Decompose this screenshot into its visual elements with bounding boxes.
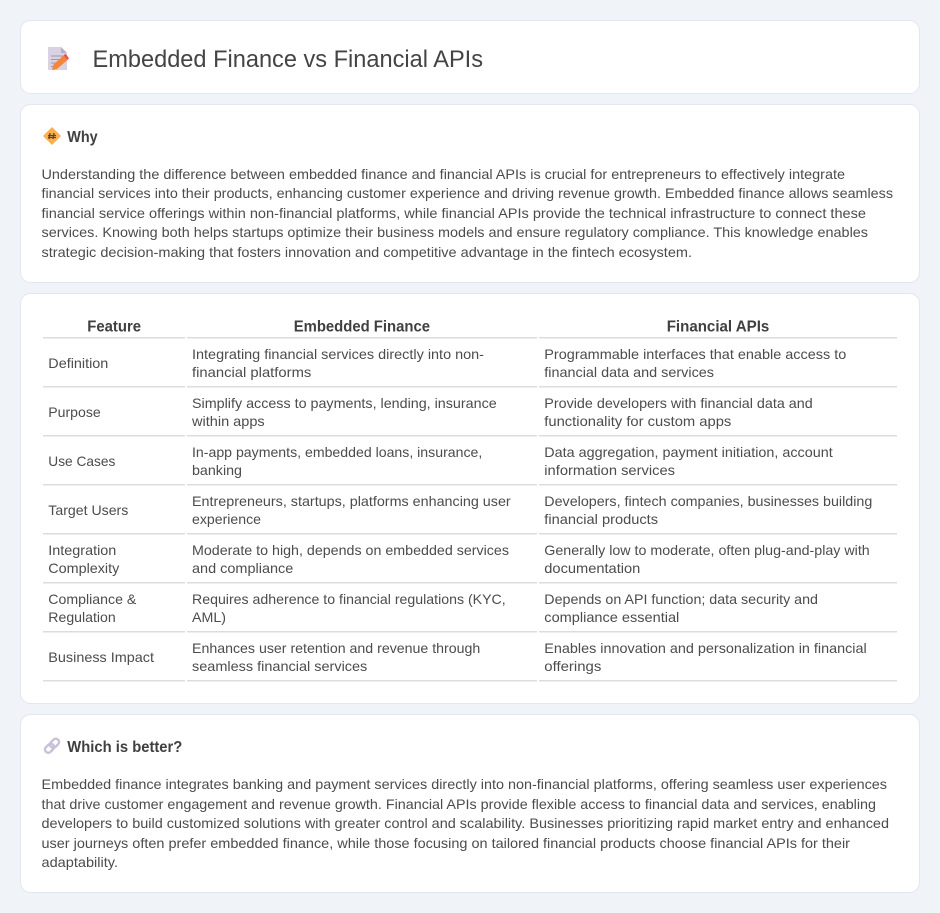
row: integration complexity: Moderate to high, depends on embedded services — [192, 542, 509, 558]
row: use cases: In-app payments, embedded loans, insurance, — [192, 444, 482, 460]
row: target users: financial products — [544, 511, 658, 527]
panel: comparison table — [20, 294, 920, 704]
row: business impact: Business Impact — [48, 649, 154, 665]
row: business impact — [48, 640, 867, 674]
panel: why — [20, 104, 920, 282]
text block: which is better paragraph: Embedded finance integrates banking and payment services directly into non-financial platforms, offering seamless user experiences — [42, 776, 887, 792]
row: integration complexity: documentation — [544, 560, 640, 576]
text block: why paragraph: Understanding the difference between embedded finance and financial APIs is crucial for entrepreneurs to effectively integrate — [42, 166, 845, 182]
text block: which is better paragraph: adaptability. — [42, 854, 118, 870]
text block: why paragraph — [42, 166, 893, 260]
row: target users: Developers, fintech companies, businesses building — [544, 493, 872, 509]
row: target users: Entrepreneurs, startups, platforms enhancing user — [192, 493, 511, 509]
row: purpose: Provide developers with financial data and — [544, 395, 813, 411]
row: use cases: information services — [544, 462, 675, 478]
text block: why paragraph: financial service offerings within non-financial platforms, while financial APIs provide the technical infrastructure to connect these — [42, 205, 866, 221]
row: compliance and regulation: Compliance & — [48, 591, 137, 607]
text block: which is better paragraph: that drive customer engagement and revenue growth. Financial APIs provide flexible access to financial data and services, enabling — [42, 796, 876, 812]
row: business impact: Enhances user retention and revenue through — [192, 640, 480, 656]
row: purpose: Simplify access to payments, lending, insurance — [192, 395, 497, 411]
table header row — [87, 319, 769, 336]
row: purpose: within apps — [191, 413, 265, 429]
row: target users: experience — [192, 511, 261, 527]
row: use cases: banking — [192, 462, 242, 478]
text block: which is better paragraph — [42, 776, 889, 870]
row: use cases — [48, 444, 833, 478]
row: purpose: Purpose — [48, 404, 101, 420]
row: integration complexity: and compliance — [192, 560, 294, 576]
row: target users: Target Users — [48, 502, 128, 518]
row: target users — [48, 493, 872, 527]
text block: why paragraph: strategic decision-making that fosters innovation and competitive advantage in the fintech ecosystem. — [42, 244, 692, 260]
table header row: Financial APIs — [667, 319, 769, 336]
row: use cases: Data aggregation, payment initiation, account — [544, 444, 833, 460]
row: business impact: offerings — [544, 658, 601, 674]
row: definition — [48, 346, 847, 380]
icon: memo with pencil — [48, 47, 69, 70]
row: purpose — [48, 395, 813, 429]
heading: which is better: Which is better? — [67, 739, 182, 756]
row: use cases: Use Cases — [48, 453, 115, 469]
row: compliance and regulation: AML) — [192, 609, 226, 625]
text block: why paragraph: financial services into their products, enhancing customer experience and driving revenue growth. Embedded finance allows seamless — [42, 185, 893, 201]
row: compliance and regulation: Depends on API function; data security and — [544, 591, 818, 607]
row: integration complexity: Complexity — [48, 560, 119, 576]
row: compliance and regulation: Regulation — [48, 609, 116, 625]
row: integration complexity: Integration — [48, 542, 116, 558]
panel: title card — [20, 20, 920, 94]
text block: which is better paragraph: developers to build customized solutions with greater control and scalability. Businesses prioritizing rapid market entry and enhanced — [42, 815, 889, 831]
row: business impact: seamless financial services — [192, 658, 367, 674]
title: Embedded Finance vs Financial APIs — [92, 46, 483, 73]
row: definition: financial platforms — [192, 364, 311, 380]
row: definition: Programmable interfaces that enable access to — [544, 346, 847, 362]
panel: which is better — [20, 714, 920, 892]
row: integration complexity — [48, 542, 870, 576]
text block: why paragraph: services. Knowing both helps startups optimize their business models and ensure regulatory compliance. This knowledge enables — [42, 224, 868, 240]
row: compliance and regulation — [48, 591, 818, 625]
row: integration complexity: Generally low to moderate, often plug-and-play with — [544, 542, 870, 558]
icon: orange warning diamond — [44, 128, 60, 144]
row: definition: Integrating financial services directly into non- — [192, 346, 484, 362]
table header row: Feature — [87, 319, 141, 336]
heading: why: Why — [67, 129, 98, 146]
row: definition: financial data and services — [544, 364, 714, 380]
row: compliance and regulation: Requires adherence to financial regulations (KYC, — [192, 591, 506, 607]
row: definition: Definition — [48, 355, 108, 371]
icon: chain link — [44, 737, 60, 754]
row: business impact: Enables innovation and personalization in financial — [544, 640, 867, 656]
table header row: Embedded Finance — [294, 319, 430, 336]
row: compliance and regulation: compliance essential — [544, 609, 679, 625]
text block: which is better paragraph: user journeys often prefer embedded finance, while those focusing on tailored financial products choose financial APIs for their — [42, 835, 850, 851]
row: purpose: functionality for custom apps — [544, 413, 731, 429]
